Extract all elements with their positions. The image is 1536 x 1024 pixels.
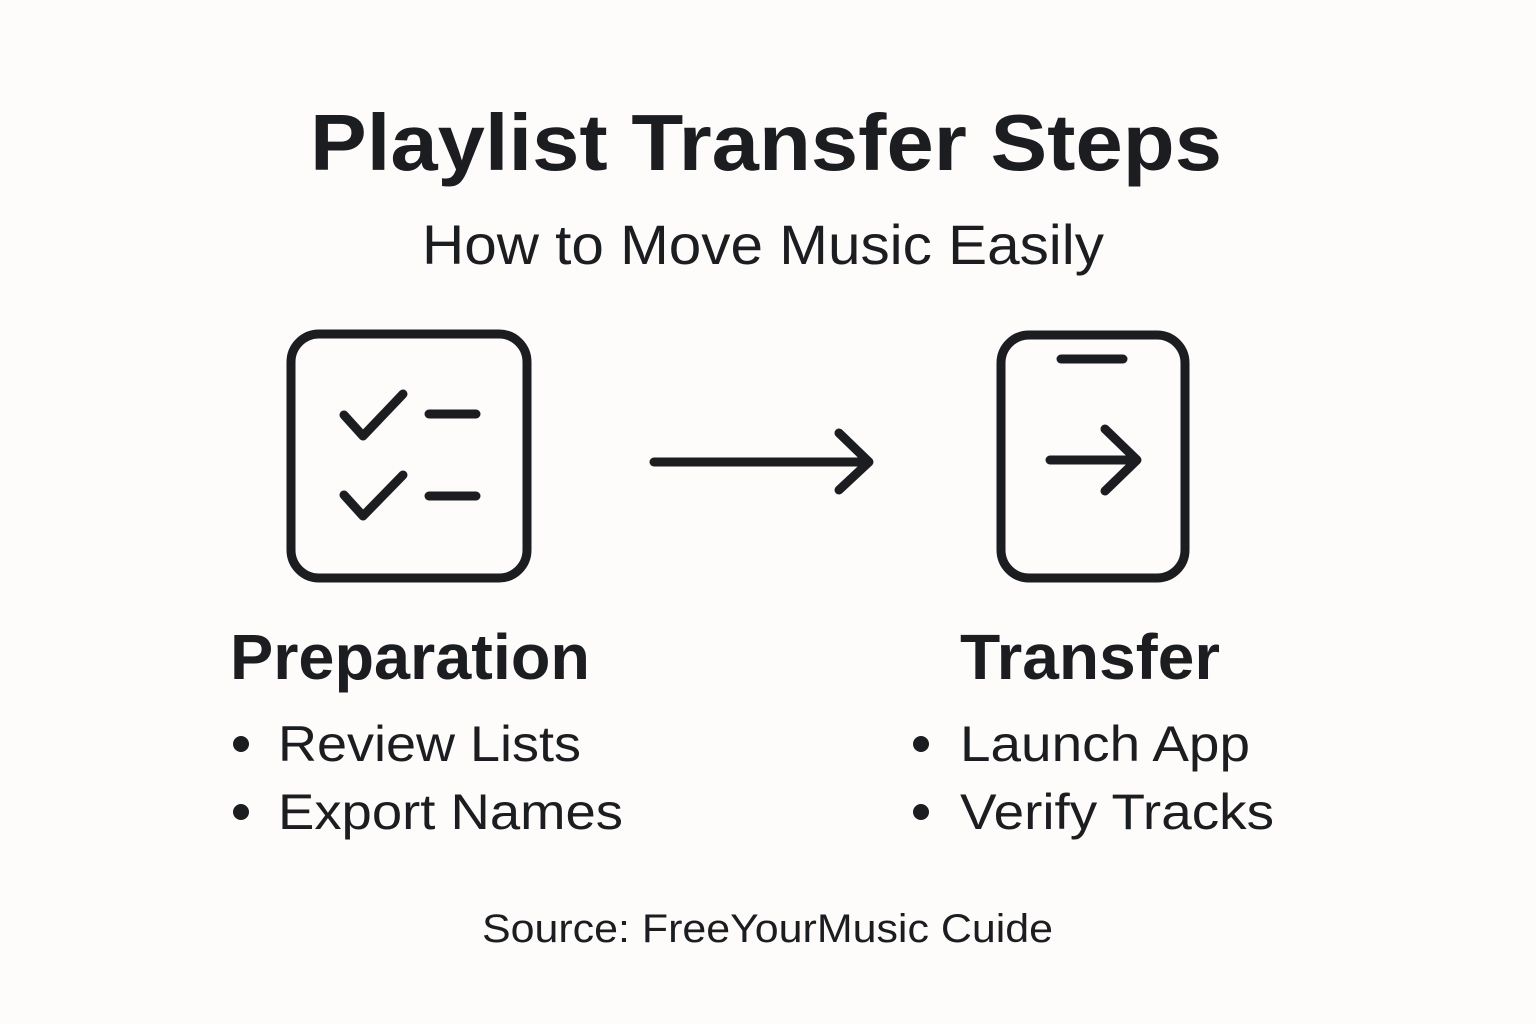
arrow: preparation to transfer <box>654 433 869 490</box>
list: transfer <box>913 716 1274 840</box>
list: transfer: Launch App <box>960 716 1250 772</box>
list: transfer: Verify Tracks <box>960 784 1274 840</box>
icon: checklist <box>291 334 527 578</box>
subtitle: How to Move Music Easily <box>422 213 1104 276</box>
list: preparation: Review Lists <box>278 716 581 772</box>
title: Playlist Transfer Steps <box>310 98 1222 187</box>
list: preparation <box>233 716 623 840</box>
icon: phone with arrow <box>1001 335 1185 578</box>
source note: Source: FreeYourMusic Cuide <box>482 907 1053 951</box>
list: preparation: Export Names <box>278 784 623 840</box>
heading: Transfer: Transfer <box>960 621 1220 693</box>
heading: Preparation: Preparation <box>230 621 590 693</box>
